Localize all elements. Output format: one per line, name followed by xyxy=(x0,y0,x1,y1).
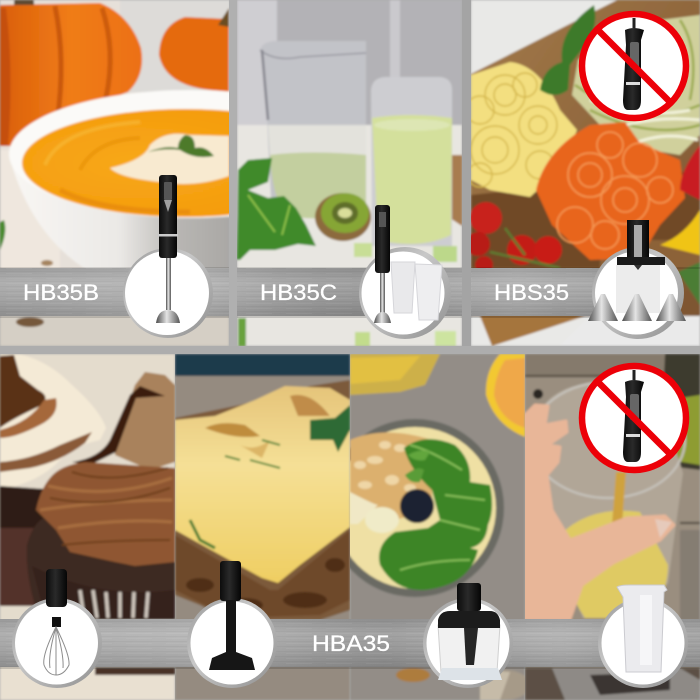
panel: pesto food processor photo xyxy=(350,354,525,700)
panel: pumpkin soup photo xyxy=(0,0,229,346)
product: HB35B blender in circle xyxy=(123,175,213,338)
horizontal metal divider xyxy=(0,346,700,354)
icon: prohibited handle sign top xyxy=(582,14,686,118)
bottom metal band xyxy=(0,619,700,669)
product: HBS35 spiralizer in circle xyxy=(588,220,686,339)
product: chopper bowl in circle xyxy=(423,583,513,688)
product: whisk attachment in circle xyxy=(12,569,102,688)
label: HBA35: HBA35 xyxy=(312,631,390,656)
label: HBS35: HBS35 xyxy=(494,280,569,305)
top metal band xyxy=(0,267,700,318)
vertical metal dividers xyxy=(229,0,471,354)
product: HB35C blender and beakers in circle xyxy=(359,205,451,339)
panel: shepherd's pie photo xyxy=(175,354,350,700)
product: measuring beaker in circle xyxy=(598,585,688,688)
panel: oil and beaker photo xyxy=(525,354,700,700)
panel: smoothie photo xyxy=(237,0,462,346)
label: HB35C: HB35C xyxy=(260,280,337,305)
label: HB35B: HB35B xyxy=(23,280,99,305)
product: blade attachment in circle xyxy=(187,561,277,688)
icon: prohibited handle sign bottom xyxy=(582,366,686,470)
panel: vegetable spirals photo xyxy=(466,0,700,346)
panel: chocolate cupcake photo xyxy=(0,354,175,700)
